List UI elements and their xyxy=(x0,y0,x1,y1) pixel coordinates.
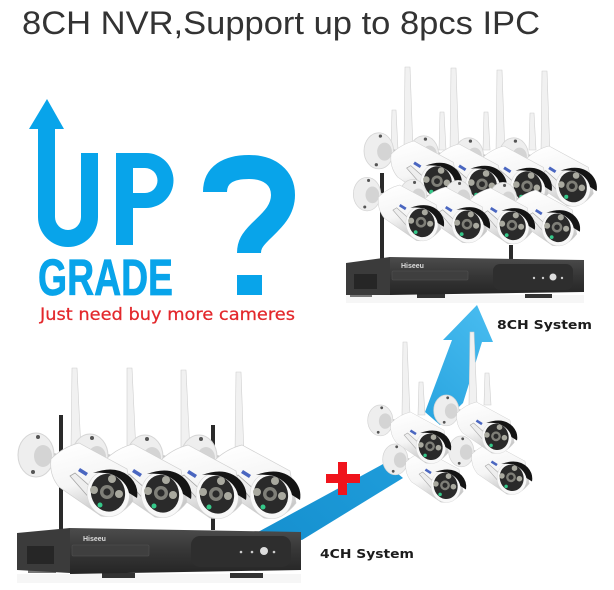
camera antennas xyxy=(391,67,550,155)
four extra cameras xyxy=(368,395,532,506)
NVR antennas xyxy=(380,173,513,259)
8CH system xyxy=(346,67,597,332)
GRADE wordmark: GRADE xyxy=(38,249,173,306)
upgrade arrow xyxy=(258,305,493,540)
title: 8CH NVR,Support up to 8pcs IPC xyxy=(22,5,540,41)
question mark xyxy=(215,167,283,295)
4CH label: 4CH System xyxy=(320,546,414,561)
NVR brand: Hiseeu xyxy=(83,536,106,543)
add-on cameras xyxy=(368,332,532,506)
plus sign xyxy=(326,462,360,495)
NVR antennas xyxy=(59,415,215,530)
NVR brand: Hiseeu xyxy=(401,263,424,270)
four cameras xyxy=(18,433,300,523)
4CH system xyxy=(17,368,414,583)
camera antennas xyxy=(71,368,244,455)
eight cameras xyxy=(353,133,597,250)
caption: just need buy more cameras: Just need buy more cameres xyxy=(39,305,295,325)
8CH label: 8CH System xyxy=(497,317,592,332)
add-on antennas xyxy=(402,332,491,415)
NVR recorder xyxy=(346,257,584,303)
letter P xyxy=(116,153,173,245)
NVR recorder xyxy=(17,528,301,583)
icon: up arrow forming the letter U xyxy=(29,99,98,247)
upgrade logo xyxy=(29,99,173,306)
